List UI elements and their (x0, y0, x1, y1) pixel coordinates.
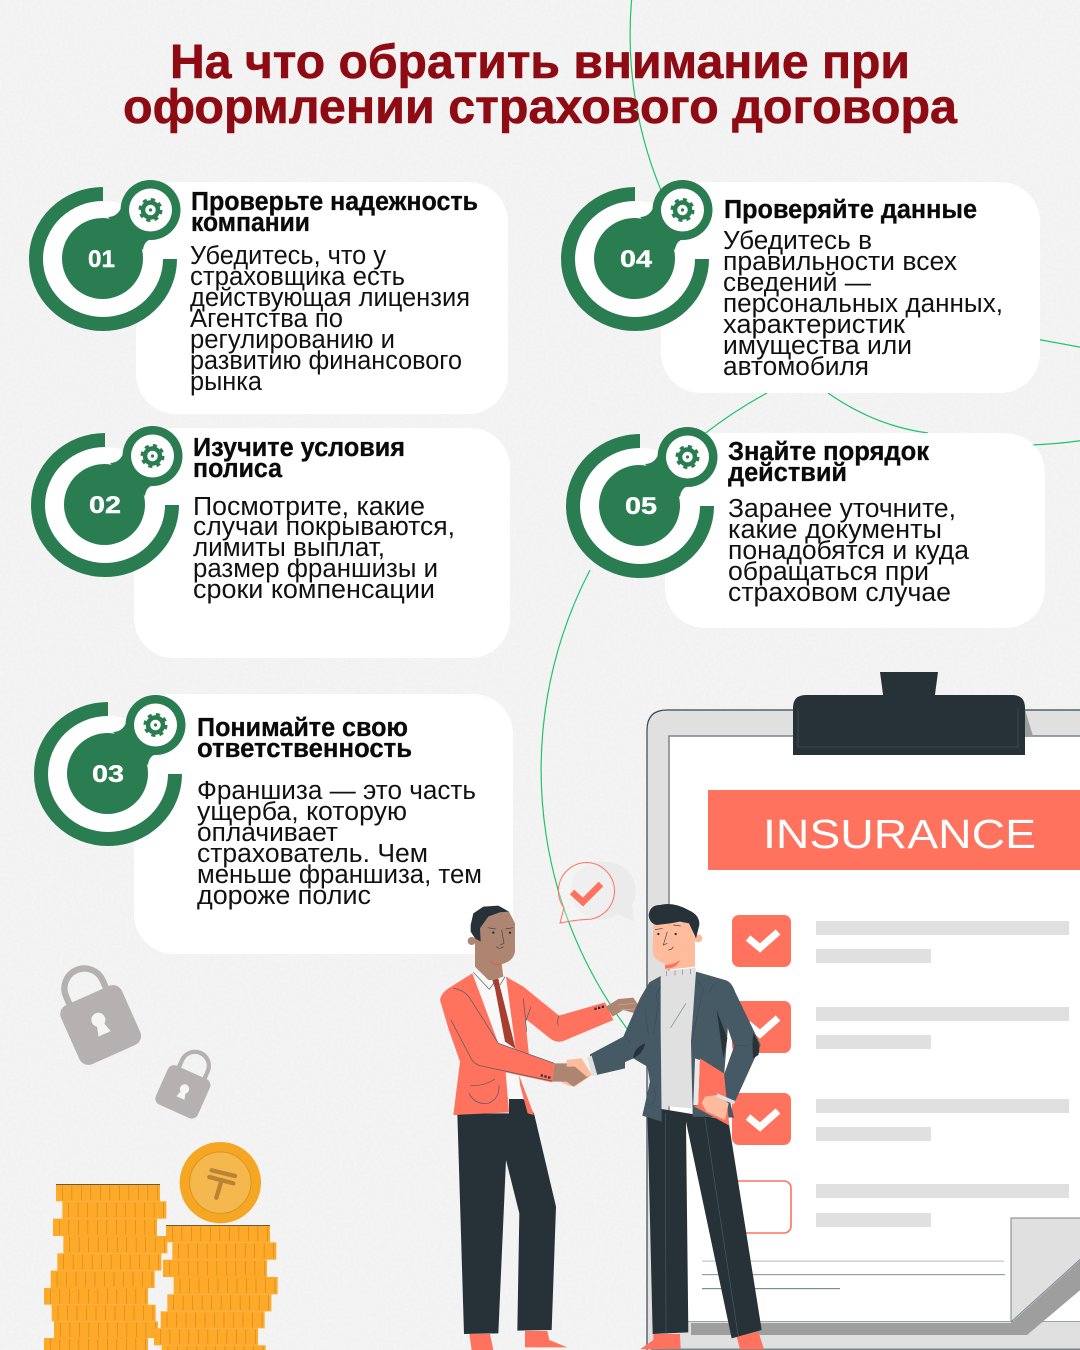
text: step 01 (190, 242, 470, 396)
text: step 03: ущерба, которую (197, 798, 407, 826)
text: step 05: какие документы (728, 516, 942, 544)
badge: 02: 02 (89, 492, 121, 519)
text: step 05: Заранее уточните, (728, 495, 956, 523)
text: step 02: случаи покрываются, (193, 513, 455, 541)
badge: 02 (38, 426, 182, 570)
heading: step 02 (193, 434, 405, 483)
text: step 01: страховщика есть (190, 263, 405, 291)
text: step 05 (728, 495, 970, 607)
text: step 02: сроки компенсации (193, 576, 435, 604)
heading: step 04: Проверяйте данные (724, 196, 977, 224)
panel: step 01 (136, 182, 508, 414)
heading: step 05 (728, 438, 929, 487)
text: step 04 (723, 227, 1003, 381)
banner: insurance: INSURANCE (763, 811, 1036, 857)
text: step 05: понадобятся и куда (728, 537, 970, 565)
figure: right man (590, 904, 764, 1349)
text: step 01: регулированию и (190, 326, 395, 354)
text: step 02: Посмотрите, какие (193, 493, 425, 521)
text: step 02 (193, 493, 455, 604)
text: step 04: имущества или (723, 332, 912, 360)
panel: step 03 (134, 694, 513, 954)
heading: step 02: Изучите условия (193, 434, 405, 462)
title: На что обратить внимание при (170, 36, 910, 89)
title: оформлении страхового договора (123, 81, 957, 134)
text: step 03: меньше франшиза, тем (197, 861, 482, 889)
text: step 02: лимиты выплат, (193, 534, 385, 562)
badge: 04 (568, 180, 712, 324)
heading: step 01 (191, 188, 478, 237)
icon: clipboard (647, 672, 1080, 1350)
badge: 05 (573, 427, 718, 571)
heading: step 02: полиса (193, 455, 283, 483)
panel: step 05 (665, 433, 1045, 628)
icon: left coin stack (44, 1184, 167, 1350)
text: step 02: размер франшизы и (193, 555, 438, 583)
badge: 03 (41, 695, 186, 839)
text: step 01: Агентства по (190, 305, 343, 333)
text: step 05: страховом случае (728, 579, 951, 607)
heading: step 03: ответственность (197, 735, 412, 763)
text: step 01: рынка (190, 368, 263, 396)
badge: 05: 05 (625, 493, 657, 520)
checklist (732, 915, 1069, 1233)
banner: insurance (708, 790, 1080, 870)
icon: large padlock (46, 957, 144, 1068)
heading: step 05: Знайте порядок (728, 438, 929, 466)
text: step 01: развитию финансового (190, 347, 462, 375)
figure: left man (440, 906, 613, 1350)
text: step 04: характеристик (723, 311, 906, 339)
text: step 04: автомобиля (723, 353, 869, 381)
text: step 01: Убедитесь, что у (190, 242, 386, 270)
text: step 04: персональных данных, (723, 290, 1003, 318)
badge: 03: 03 (92, 761, 124, 788)
icon: right coin stack (154, 1225, 278, 1350)
panel: step 04 (661, 182, 1040, 393)
text: step 03 (197, 777, 482, 910)
text: step 03: Франшиза — это часть (197, 777, 476, 805)
text: step 03: оплачивает (197, 819, 338, 847)
text: step 04: Убедитесь в (723, 227, 872, 255)
illustration: two people shaking hands (440, 904, 764, 1350)
icon: speech bubble with check (558, 862, 636, 923)
text: step 03: страхователь. Чем (197, 840, 428, 868)
heading: step 03 (197, 714, 412, 763)
text: step 05: обращаться при (728, 558, 929, 586)
icon: tenge coin (180, 1142, 261, 1223)
text: step 01: действующая лицензия (190, 284, 470, 312)
badge: 04: 04 (620, 246, 652, 273)
panel: step 02 (134, 428, 510, 658)
icon: small padlock (153, 1044, 221, 1121)
text: step 04: сведений — (723, 269, 872, 297)
heading: step 03: Понимайте свою (197, 714, 408, 742)
icons: padlocks and coins (44, 957, 278, 1350)
badge: 01: 01 (88, 246, 115, 273)
heading: step 01: компании (191, 209, 310, 237)
heading: step 01: Проверьте надежность (191, 188, 478, 216)
badge: 01 (36, 180, 180, 324)
heading: step 05: действий (728, 459, 847, 487)
text: step 03: дороже полис (197, 882, 371, 910)
title (123, 36, 957, 134)
text: step 04: правильности всех (723, 248, 957, 276)
icon: handshake (552, 1037, 625, 1087)
